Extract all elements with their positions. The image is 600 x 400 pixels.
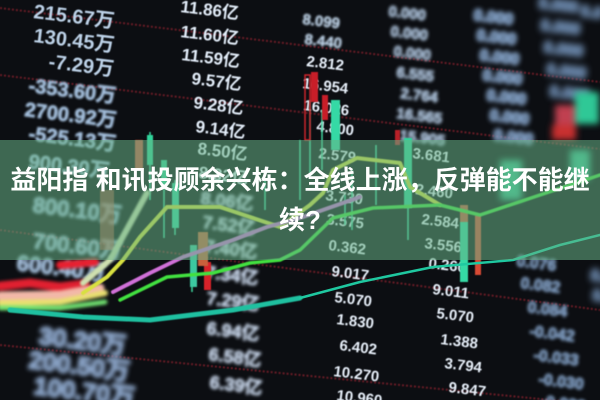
magenta line: [113, 197, 360, 292]
column: amounts in yi, lower blurred: 6.94亿: [206, 318, 261, 344]
title: 续?: [279, 205, 321, 235]
pale line: [83, 193, 147, 283]
column: amounts in wan, large blurred lower: 200.50万: [27, 346, 131, 386]
column: amounts in wan, large blurred lower: [27, 322, 136, 400]
green line: [120, 175, 600, 300]
column: amounts in yi, lower blurred: 8.06亿: [200, 188, 255, 214]
column: numbers, blurred top: [302, 11, 343, 53]
column: second numbers, sharp: 2.460: [415, 181, 454, 203]
column: amounts in yi, lower blurred: 7.40亿: [204, 236, 259, 262]
column: amounts in wan, blurred middle: 900.30万: [27, 151, 111, 183]
column: second numbers, sharp: 9.011: [432, 281, 470, 302]
column: third numbers, heavily blurred top: 0.000: [486, 87, 527, 109]
column: third numbers, heavily blurred top: 0.000: [473, 7, 514, 29]
column: second numbers, blurred top: 15.905: [399, 127, 446, 150]
title: 益阳指 和讯投顾余兴栋：全线上涨，反弹能不能继: [10, 165, 590, 195]
column: third numbers, heavily blurred top: [473, 7, 534, 149]
column: second numbers, sharp: 2.584: [421, 211, 460, 233]
column: amounts in yi, lower blurred: 6.58亿: [208, 344, 263, 370]
column: numbers, sharp: 2.812: [306, 53, 345, 75]
column: amounts in yi, lower blurred: 6.39亿: [209, 372, 264, 398]
column: amounts in yi, lower blurred: 7.29亿: [206, 288, 261, 314]
column: far right blurred numbers: [538, 0, 600, 307]
column: second numbers, sharp: 3.681: [412, 145, 451, 167]
column: amounts in wan, blurred in band: [15, 192, 123, 286]
column: third numbers, heavily blurred top: 0.000: [493, 127, 534, 149]
column: amounts in yi, upper: 11.60亿: [180, 22, 240, 48]
column: amounts in wan, upper: 130.45万: [32, 25, 116, 57]
column: amounts in yi, lower blurred: [200, 188, 264, 398]
column: second numbers, sharp: 3.794: [444, 355, 483, 377]
column: numbers, sharp: 0.362: [328, 237, 367, 259]
column: third numbers, heavily blurred top: 0.000: [489, 107, 530, 129]
column: second numbers, blurred top: 16.565: [396, 105, 443, 128]
column: amounts in wan, blurred middle: 2700.92万: [23, 99, 118, 132]
column: numbers, sharp: 10.270: [333, 363, 380, 386]
column: numbers, blurred top: 8.099: [302, 11, 341, 33]
column: amounts in wan, blurred in band: 700.60万: [31, 228, 123, 264]
column: amounts in yi, lower blurred: 7.34亿: [205, 262, 260, 288]
column: third numbers, blurred bottom: -0.030: [538, 371, 585, 394]
column: amounts in wan, blurred middle: -525.13万: [27, 123, 117, 156]
yellow line: [83, 158, 440, 293]
column: third numbers, blurred bottom: -0.033: [533, 347, 580, 370]
column: third numbers, blurred bottom: 0.076: [516, 253, 557, 275]
column: third numbers, heavily blurred top: 0.000: [479, 47, 520, 69]
column: second numbers, blurred top: 6.555: [396, 64, 435, 86]
column: third numbers, heavily blurred top: 0.000: [482, 67, 523, 89]
column: second numbers, sharp: 0.260: [428, 255, 467, 277]
column: numbers, sharp: 2.579: [318, 145, 357, 167]
column: second numbers, blurred top: [388, 3, 446, 150]
teal line, right: [300, 235, 600, 298]
column: numbers, sharp: 3.575: [326, 211, 365, 233]
column: numbers, sharp: 9.017: [331, 263, 370, 285]
column: numbers, sharp: 6.402: [339, 337, 378, 359]
column: third numbers, blurred bottom: 0.082: [520, 275, 561, 297]
column: amounts in wan, blurred middle: -353.60万: [27, 75, 117, 108]
title band: [0, 140, 600, 260]
column: numbers, sharp: 3.730: [325, 187, 364, 209]
column: amounts in wan, upper: -7.29万: [47, 51, 115, 81]
candlestick chart: [100, 72, 481, 292]
column: third numbers, heavily blurred top: 0.000: [476, 27, 517, 49]
column: third numbers, blurred bottom: 0.084: [527, 299, 568, 321]
column: second numbers, blurred top: 0.000: [393, 43, 432, 65]
column: third numbers, blurred bottom: -0.042: [529, 323, 576, 346]
column: second numbers, sharp: 3.556: [424, 235, 463, 257]
column: amounts in yi, lower blurred: 7.52亿: [202, 212, 257, 238]
column: numbers, sharp: [302, 53, 383, 400]
column: second numbers, sharp: 9.847: [448, 379, 487, 400]
column: amounts in yi, upper: [180, 0, 250, 188]
column: amounts in wan, blurred in band: 800.10万: [31, 192, 123, 228]
column: second numbers, sharp: 1.388: [440, 331, 479, 353]
column: numbers, blurred top: 8.440: [304, 31, 343, 53]
moving-average lines: [10, 158, 600, 320]
blurred moving-average lines at left: [0, 262, 105, 308]
column: second numbers, blurred top: 0.000: [388, 3, 427, 25]
column: far right blurred numbers: 0.000: [540, 17, 581, 39]
column: amounts in wan, large blurred lower: 30.20万: [37, 322, 128, 361]
column: amounts in wan, upper: [32, 1, 116, 81]
column: far right blurred numbers: 0.000: [543, 39, 584, 61]
column: amounts in wan, blurred in band: 600.40万: [15, 250, 107, 286]
column: second numbers, sharp: 5.070: [436, 305, 475, 327]
column: far right blurred numbers: 0.000: [549, 83, 590, 105]
blurred candles at right: [500, 92, 599, 200]
title: [10, 165, 590, 235]
column: numbers, sharp: 5.070: [334, 289, 373, 311]
column: amounts in wan, blurred middle: [23, 75, 118, 183]
teal line, left: [10, 298, 300, 320]
column: amounts in yi, upper: 9.28亿: [193, 93, 245, 118]
column: amounts in yi, upper: 9.14亿: [195, 117, 247, 142]
column: numbers, sharp: 16.026: [303, 97, 350, 120]
column: amounts in yi, upper: 8.32亿: [198, 163, 250, 188]
column: second numbers, blurred top: 0.000: [390, 23, 429, 45]
column: amounts in yi, upper: 9.57亿: [191, 69, 243, 94]
column: second numbers, sharp: [412, 145, 487, 400]
column: far right blurred numbers: 0.000: [546, 61, 587, 83]
column: amounts in yi, upper: 8.50亿: [197, 139, 249, 164]
column: amounts in yi, upper: 11.59亿: [181, 45, 241, 71]
column: third numbers, blurred bottom: [516, 253, 587, 400]
column: numbers, sharp: 16.954: [302, 75, 350, 98]
column: numbers, sharp: 1.830: [336, 311, 375, 333]
column: amounts in wan, upper: 215.67万: [32, 1, 116, 33]
column: numbers, sharp: 4.800: [316, 118, 355, 140]
column: second numbers, blurred top: 2.764: [400, 85, 439, 107]
